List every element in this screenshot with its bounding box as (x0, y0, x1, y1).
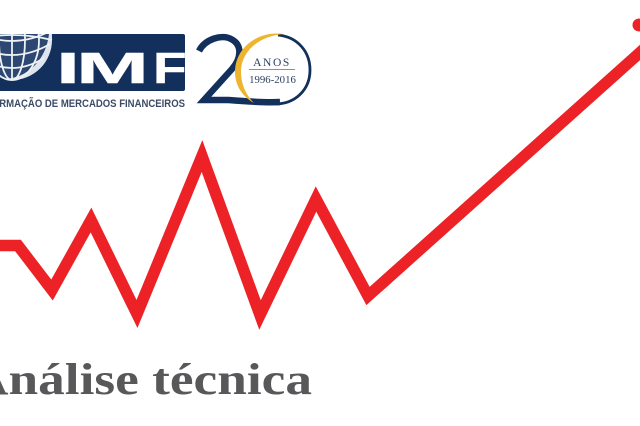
line chart: red zigzag rising line (0, 48, 640, 315)
icon: globe (0, 34, 52, 81)
anniversary ring navy (275, 35, 310, 104)
IMF wordmark: F (153, 44, 187, 93)
ANOS label: ANOS (253, 57, 291, 69)
digit 2 (199, 37, 280, 102)
logo: 20 anos (199, 33, 310, 104)
IMF wordmark: M (76, 44, 149, 93)
logo: IMF (0, 34, 185, 110)
IMF wordmark (56, 44, 187, 93)
divider (249, 69, 295, 70)
chart end dot (632, 18, 640, 32)
years label: 1996-2016 (249, 74, 296, 86)
logo banner (0, 34, 185, 91)
anniversary ring gold (235, 33, 284, 103)
IMF wordmark: I (56, 44, 80, 93)
